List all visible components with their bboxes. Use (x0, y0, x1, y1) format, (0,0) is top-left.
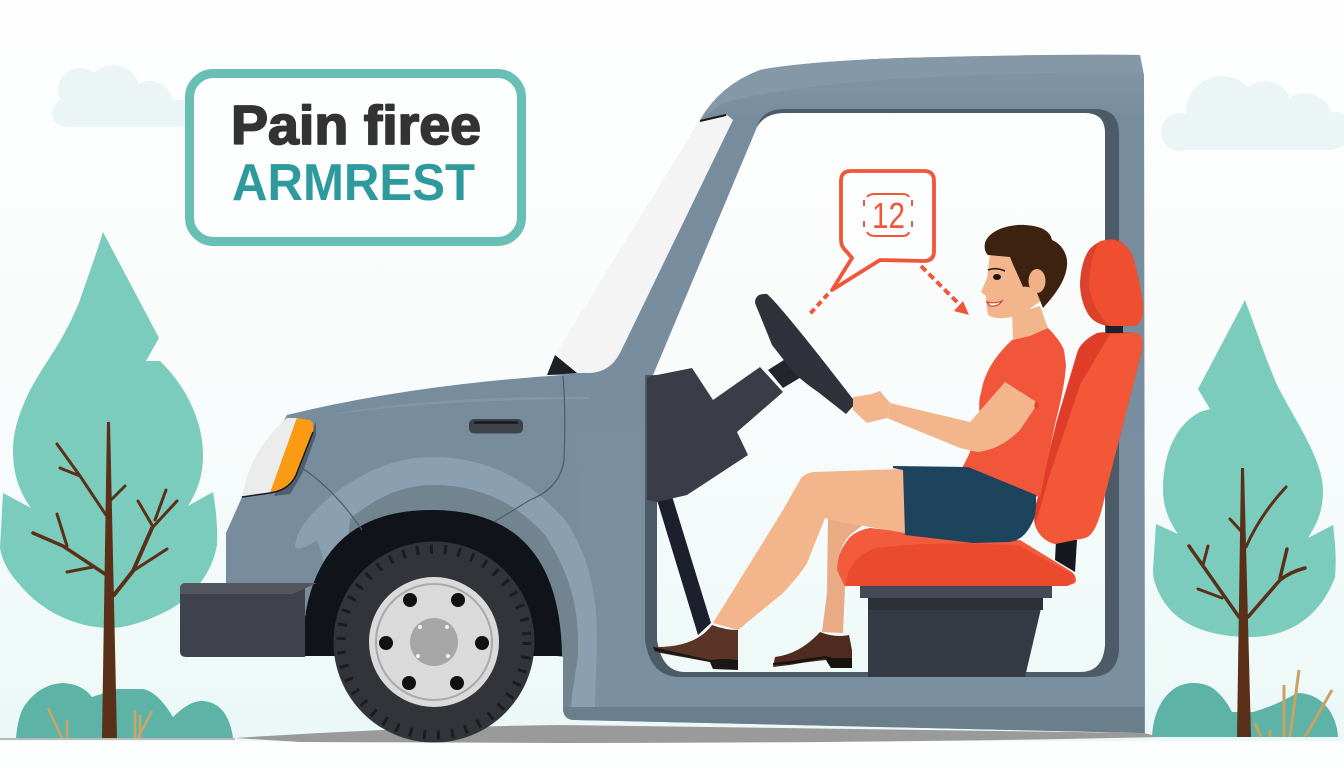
dashboard and steering (647, 294, 856, 635)
shirt (962, 328, 1066, 497)
neck (1012, 306, 1048, 340)
right bush (1152, 683, 1338, 737)
person (653, 225, 1067, 670)
front leg (713, 469, 905, 630)
seat cushion shade (846, 543, 1074, 586)
cab body (547, 55, 1145, 733)
shorts (893, 466, 1036, 543)
dashed line to wheel (808, 294, 828, 316)
seat cushion (835, 528, 1076, 586)
wheel well (302, 510, 562, 656)
hair (985, 225, 1067, 308)
seat (835, 239, 1143, 677)
ground shadow (235, 725, 1160, 743)
back shoe heel (773, 656, 852, 668)
hand (853, 391, 890, 423)
seat base shadow (868, 597, 1043, 610)
cloud left (52, 65, 198, 127)
door opening (653, 113, 1105, 672)
steering wheel (755, 294, 856, 414)
arm (887, 382, 1038, 452)
hood highlight (337, 397, 590, 414)
title line 2: ARMREST (232, 154, 475, 212)
title line 1: Pain firee (231, 94, 481, 156)
fender light arc (295, 457, 597, 707)
eye and brow (988, 269, 1005, 280)
right grass (1255, 670, 1332, 737)
front shoe sole (653, 647, 738, 670)
right tree foliage (1153, 300, 1336, 637)
pedal post (657, 496, 711, 635)
headrest post (1106, 324, 1123, 333)
bubble number: 12 (872, 195, 905, 236)
roof highlight (700, 55, 1143, 120)
fender inner arc (340, 485, 578, 707)
bumper (180, 583, 317, 657)
back leg (822, 518, 863, 633)
windshield (555, 115, 733, 373)
windshield seal (700, 115, 726, 121)
ear (1028, 269, 1046, 293)
bubble bracket (864, 194, 912, 236)
right trunk and branches (1189, 468, 1305, 737)
ground line (0, 738, 235, 740)
headlight (242, 418, 316, 497)
headrest (1080, 239, 1143, 326)
face (981, 245, 1042, 318)
windshield corner (547, 355, 577, 375)
sleeve edge (1034, 401, 1039, 410)
front wheel (334, 542, 534, 742)
dashboard (647, 367, 783, 502)
front shoe (653, 625, 738, 668)
left bush (16, 683, 233, 738)
seat base (868, 600, 1043, 677)
seat post (1055, 540, 1077, 572)
door handle (469, 419, 523, 434)
backrest face (1035, 333, 1142, 544)
speech bubble (832, 171, 934, 290)
door frame (645, 109, 1119, 677)
backrest (1034, 332, 1142, 544)
headrest face (1089, 240, 1143, 326)
seam lines (302, 376, 565, 530)
seat base cap (860, 585, 1052, 598)
back shoe (773, 632, 852, 668)
left trunk and branches (33, 422, 177, 738)
left grass (48, 708, 152, 738)
mouth (987, 301, 1002, 306)
lower sill shade (563, 707, 1144, 733)
hood and fender (226, 375, 580, 660)
left tree (0, 232, 233, 738)
truck (180, 55, 1145, 743)
steering column (768, 358, 803, 388)
cloud right (1161, 76, 1344, 151)
left tree foliage (0, 232, 217, 628)
right tree (1152, 300, 1338, 737)
title box (190, 74, 522, 242)
dashed arrow to face (921, 266, 969, 315)
